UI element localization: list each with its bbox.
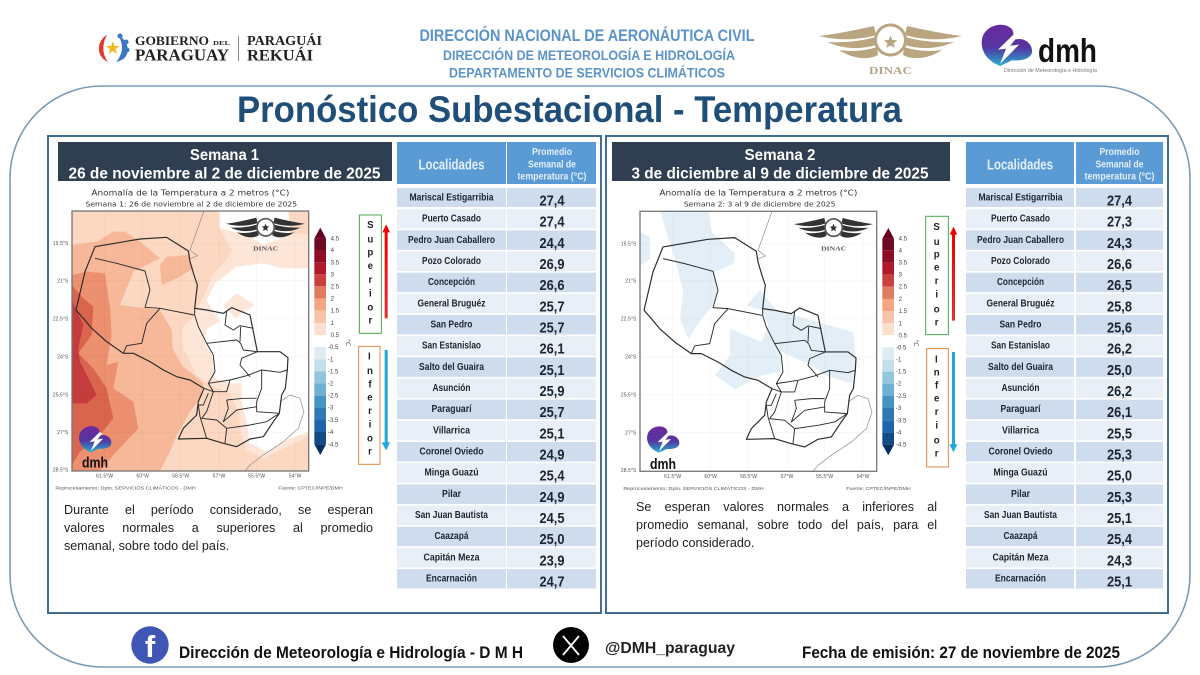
- banner: semana 1: Semana 1: [190, 147, 259, 164]
- row: Pozo Colorado: 26,6: [1107, 257, 1132, 273]
- row: Mariscal Estigarribia: [966, 188, 1163, 210]
- banner: semana 2: 3 de diciembre al 9 de diciembre de 2025: [632, 166, 929, 182]
- row: Paraguarí: Paraguarí: [1000, 404, 1042, 415]
- colorbar: 4.5: [331, 236, 340, 242]
- row: Pilar: [966, 484, 1163, 506]
- row: San Estanislao: 26,1: [540, 342, 564, 358]
- row: Villarrica: [397, 421, 596, 442]
- institutional header text: [420, 26, 754, 80]
- row: Concepción: [966, 273, 1163, 294]
- colorbar: -2: [328, 381, 334, 387]
- row: Asunción: 25,9: [540, 384, 564, 400]
- chart: mapa de anomalía semana 2: [621, 188, 957, 492]
- colorbar: 3: [331, 272, 335, 278]
- axis labels: 55.5°W: [248, 474, 265, 480]
- institutional header text: DIRECCIÓN DE METEOROLOGÍA E HIDROLOGÍA: [443, 48, 735, 63]
- axis labels: 61.5°W: [664, 474, 681, 480]
- legend: superior: p: [367, 247, 373, 258]
- legend: inferior: i: [369, 419, 371, 430]
- legend: superior: p: [934, 250, 940, 261]
- banner: semana 1: [58, 142, 392, 182]
- icon: logo dmh en mapa: dmh: [650, 457, 676, 473]
- row: Villarrica: Villarrica: [433, 425, 470, 436]
- row: San Estanislao: [966, 336, 1163, 358]
- row: Pozo Colorado: Pozo Colorado: [991, 256, 1050, 267]
- colorbar: -2: [896, 382, 902, 388]
- row: Caazapá: 25,0: [540, 532, 564, 548]
- table header: Promedio: [532, 147, 572, 158]
- colorbar: -3.5: [328, 418, 339, 424]
- logo: DINAC: DINAC: [869, 65, 912, 77]
- row: Asunción: 26,2: [1107, 384, 1132, 400]
- colorbar: 2.5: [899, 285, 908, 291]
- colorbar: 0.5: [331, 333, 340, 339]
- row: San Pedro: [397, 315, 596, 337]
- row: Mariscal Estigarribia: 27,4: [540, 194, 564, 210]
- axis labels: 19.5°S: [621, 241, 637, 247]
- source notes: [55, 485, 343, 492]
- colorbar: -1.5: [328, 369, 339, 375]
- axis labels: 19.5°S: [53, 241, 69, 247]
- row: Salto del Guaira: 25,1: [540, 363, 564, 379]
- row: Pilar: Pilar: [442, 489, 461, 500]
- footer text: facebook account: Dirección de Meteorología e Hidrología - D M H: [179, 644, 523, 662]
- icon: logo DINAC en mapa: DINAC: [821, 246, 846, 253]
- table header: Semanal de: [1096, 160, 1144, 170]
- colorbar: 1: [899, 321, 903, 327]
- colorbar: -1: [328, 357, 334, 363]
- row: San Pedro: San Pedro: [1000, 320, 1042, 331]
- source notes: Reprocesamiento: Dpto. SERVICIOS CLIMÁTICOS - DMH: [55, 485, 196, 492]
- row: Villarrica: 25,5: [1107, 426, 1132, 442]
- row: Encarnación: 24,7: [540, 575, 564, 591]
- axis labels: [53, 241, 301, 480]
- axis labels: 58.5°W: [740, 474, 757, 480]
- axis labels: 54°W: [857, 474, 869, 480]
- legend: inferior: r: [368, 447, 372, 458]
- legend: inferior: o: [367, 433, 373, 444]
- banner: semana 1: 26 de noviembre al 2 de diciembre de 2025: [68, 166, 381, 182]
- row: Caazapá: [397, 527, 596, 548]
- legend: inferior: r: [368, 406, 372, 417]
- row: Mariscal Estigarribia: [397, 188, 596, 210]
- colorbar: 3.5: [331, 260, 340, 266]
- legend: superior: r: [935, 318, 939, 329]
- legend: superior: r: [935, 276, 939, 287]
- source notes: Reprocesamiento: Dpto. SERVICIOS CLIMÁTICOS - DMH: [623, 485, 764, 492]
- logo: dmh: [982, 25, 1098, 74]
- colorbar: -1.5: [896, 370, 907, 376]
- chart: mapa de anomalía semana 1: Semana 1: 26 de noviembre al 2 de diciembre de 2025: [85, 200, 297, 208]
- row: Minga Guazú: [397, 463, 596, 485]
- row: Mariscal Estigarribia: Mariscal Estigarribia: [978, 192, 1063, 204]
- row: General Bruguéz: General Bruguéz: [986, 298, 1054, 309]
- icon: logo DINAC en mapa: DINAC: [253, 245, 278, 252]
- row: San Estanislao: San Estanislao: [991, 341, 1050, 352]
- footer text: fecha de emisión: Fecha de emisión: 27 de noviembre de 2025: [802, 644, 1120, 662]
- source notes: Fuente: CPTEC/INPE/DMH: [278, 486, 343, 492]
- row: Asunción: Asunción: [432, 383, 470, 394]
- row: Pilar: 25,3: [1107, 490, 1132, 506]
- row: Pedro Juan Caballero: 24,4: [540, 236, 564, 252]
- colorbar: [314, 228, 351, 455]
- colorbar: -4: [328, 430, 334, 436]
- table: semana 2: [966, 142, 1163, 591]
- legend: inferior: I: [368, 352, 371, 363]
- row: Minga Guazú: [966, 463, 1163, 485]
- row: Concepción: [397, 273, 596, 294]
- legend: inferior: I: [935, 354, 938, 365]
- row: San Estanislao: San Estanislao: [422, 341, 481, 352]
- colorbar: -0.5: [328, 345, 339, 351]
- row: Pozo Colorado: 26,9: [540, 257, 564, 273]
- legend: superior: o: [367, 302, 373, 313]
- row: Pozo Colorado: [397, 252, 596, 273]
- row: Puerto Casado: [966, 209, 1163, 231]
- legend: superior: S: [367, 220, 374, 231]
- row: General Bruguéz: General Bruguéz: [418, 298, 486, 309]
- row: General Bruguéz: [966, 294, 1163, 315]
- row: San Juan Bautista: [397, 506, 596, 527]
- row: Minga Guazú: Minga Guazú: [424, 468, 478, 479]
- legend: superior: S: [933, 222, 940, 233]
- legend: superior: u: [934, 237, 940, 248]
- legend: inferior: e: [367, 393, 373, 404]
- icon: logo DINAC en mapa: [226, 218, 305, 252]
- institutional header text: DEPARTAMENTO DE SERVICIOS CLIMÁTICOS: [449, 66, 725, 80]
- logo: dmh: dmh: [1038, 32, 1097, 69]
- panel: semana 2: [606, 136, 1168, 613]
- row: San Juan Bautista: San Juan Bautista: [415, 510, 488, 521]
- table header: [397, 142, 596, 184]
- axis labels: 57°W: [213, 474, 225, 480]
- logo: Gobierno del Paraguay: [99, 33, 322, 64]
- row: Concepción: 26,5: [1107, 278, 1132, 294]
- row: Minga Guazú: 25,0: [1107, 469, 1132, 485]
- source notes: [623, 485, 911, 492]
- text block: semana 2: período considerado.: [636, 536, 754, 550]
- banner: semana 2: Semana 2: [744, 147, 816, 164]
- row: General Bruguéz: [397, 294, 596, 315]
- logo: Gobierno del Paraguay: DEL: [213, 40, 231, 47]
- axis labels: 57°W: [781, 474, 793, 480]
- row: San Pedro: San Pedro: [430, 320, 472, 331]
- colorbar: 2: [331, 297, 335, 303]
- legend: superior: e: [368, 261, 374, 272]
- chart: mapa de anomalía semana 2: Semana 2: 3 al 9 de diciembre de 2025: [684, 201, 835, 209]
- logo: dmh: Dirección de Meteorología e Hidrología: [1004, 68, 1098, 74]
- legend: superior: u: [367, 234, 373, 245]
- axis labels: 27°S: [57, 430, 69, 436]
- legend: inferior: r: [935, 449, 939, 460]
- legend: superior: [359, 215, 390, 333]
- logo: Gobierno del Paraguay: PARAGUAY: [135, 46, 229, 64]
- banner: semana 2: [612, 142, 950, 182]
- icon: logo dmh en mapa: [647, 426, 679, 473]
- row: Mariscal Estigarribia: 27,4: [1107, 194, 1132, 210]
- row: Caazapá: [966, 527, 1163, 548]
- colorbar: 3: [899, 273, 903, 279]
- axis labels: 58.5°W: [172, 474, 189, 480]
- axis labels: 55.5°W: [816, 474, 833, 480]
- legend: superior: o: [934, 304, 940, 315]
- row: Encarnación: [397, 569, 596, 591]
- icon: facebook: f: [145, 629, 156, 664]
- colorbar: -1: [896, 358, 902, 364]
- row: Minga Guazú: 25,4: [540, 469, 564, 485]
- colorbar: 3.5: [899, 261, 908, 267]
- colorbar: [882, 228, 919, 455]
- source notes: Fuente: CPTEC/INPE/DMH: [846, 486, 911, 492]
- table header: [966, 142, 1163, 184]
- icon: logo dmh en mapa: [79, 426, 111, 472]
- row: San Juan Bautista: 25,1: [1107, 511, 1132, 527]
- axis labels: 24°S: [57, 354, 69, 360]
- colorbar: -2.5: [328, 394, 339, 400]
- row: Capitán Meza: Capitán Meza: [424, 552, 480, 563]
- legend: inferior: r: [935, 407, 939, 418]
- row: Pedro Juan Caballero: [397, 230, 596, 252]
- panel: semana 1: [48, 136, 601, 613]
- footer text: X account: @DMH_paraguay: [605, 640, 735, 657]
- axis labels: 21°S: [57, 278, 69, 284]
- axis labels: [621, 241, 869, 480]
- row: Puerto Casado: Puerto Casado: [991, 214, 1050, 225]
- axis labels: 28.5°S: [621, 468, 637, 474]
- row: Coronel Oviedo: Coronel Oviedo: [988, 447, 1052, 458]
- row: Caazapá: Caazapá: [434, 531, 469, 542]
- colorbar: 4.5: [899, 237, 908, 243]
- legend: superior: i: [369, 288, 372, 299]
- text block: semana 1: semanal, sobre todo del país.: [64, 539, 229, 553]
- row: Capitán Meza: 24,3: [1107, 553, 1132, 569]
- chart: mapa de anomalía semana 1: [53, 187, 390, 492]
- legend: inferior: [927, 349, 957, 467]
- colorbar: 4: [899, 248, 903, 254]
- row: Pilar: 24,9: [540, 490, 564, 506]
- row: Pedro Juan Caballero: [966, 230, 1163, 252]
- row: Puerto Casado: [397, 209, 596, 231]
- row: Villarrica: Villarrica: [1002, 425, 1039, 436]
- table: semana 1: [397, 142, 596, 591]
- colorbar: -2.5: [896, 394, 907, 400]
- row: Pedro Juan Caballero: Pedro Juan Caballero: [408, 235, 495, 246]
- logo: Gobierno del Paraguay: GOBIERNO: [135, 34, 209, 48]
- row: Encarnación: Encarnación: [995, 574, 1046, 585]
- colorbar: 0.5: [899, 333, 908, 339]
- row: Concepción: Concepción: [428, 277, 475, 288]
- row: San Juan Bautista: [966, 506, 1163, 527]
- row: Coronel Oviedo: 24,9: [540, 448, 564, 464]
- row: San Juan Bautista: 24,5: [540, 511, 564, 527]
- row: Salto del Guaira: 25,0: [1107, 363, 1132, 379]
- table header: temperatura (°C): [1084, 172, 1154, 182]
- chart: mapa de anomalía semana 1: Anomalía de la Temperatura a 2 metros (°C): [91, 187, 289, 197]
- legend: superior: [926, 216, 957, 335]
- row: Concepción: 26,6: [540, 278, 564, 294]
- legend: inferior: e: [934, 394, 940, 405]
- row: Pozo Colorado: Pozo Colorado: [422, 256, 481, 267]
- row: Pilar: [397, 484, 596, 506]
- legend: superior: i: [935, 290, 938, 301]
- text block: semana 1: valores normales a superiores al promedio: [64, 521, 373, 535]
- axis labels: 54°W: [289, 474, 301, 480]
- row: Encarnación: [966, 569, 1163, 591]
- row: Paraguarí: 25,7: [540, 405, 564, 421]
- axis labels: 28.5°S: [53, 468, 69, 474]
- row: Paraguarí: [397, 400, 596, 421]
- icon: X: [553, 627, 589, 663]
- row: Asunción: [966, 379, 1163, 400]
- row: San Pedro: 25,7: [540, 321, 564, 337]
- row: Asunción: [397, 379, 596, 400]
- colorbar: 2: [899, 297, 903, 303]
- logo: DINAC: [819, 25, 962, 77]
- axis labels: 27°S: [625, 430, 637, 436]
- row: Paraguarí: 26,1: [1107, 405, 1132, 421]
- table header: Localidades: [418, 158, 484, 174]
- legend: inferior: n: [934, 368, 940, 379]
- axis labels: 61.5°W: [96, 474, 113, 480]
- legend: inferior: f: [368, 379, 372, 390]
- row: San Estanislao: 26,2: [1107, 342, 1132, 358]
- legend: inferior: f: [935, 380, 939, 391]
- table header: Promedio: [1100, 147, 1140, 158]
- row: Salto del Guaira: Salto del Guaira: [988, 362, 1053, 373]
- axis labels: 21°S: [625, 279, 637, 285]
- legend: superior: r: [368, 316, 372, 327]
- legend: inferior: n: [367, 366, 373, 377]
- icon: logo dmh en mapa: dmh: [82, 456, 108, 472]
- title: Pronóstico Subestacional - Temperatura: [237, 89, 902, 130]
- row: San Pedro: 25,6: [1107, 321, 1132, 337]
- row: Minga Guazú: Minga Guazú: [994, 468, 1048, 479]
- legend: superior: r: [368, 275, 372, 286]
- row: San Estanislao: [397, 336, 596, 358]
- axis labels: 60°W: [136, 474, 149, 480]
- colorbar: -3.5: [896, 418, 907, 424]
- row: Caazapá: Caazapá: [1004, 531, 1038, 542]
- colorbar: -3: [896, 406, 902, 412]
- logo: Gobierno del Paraguay: REKUÁI: [247, 48, 313, 64]
- colorbar: 1.5: [331, 309, 340, 315]
- row: Mariscal Estigarribia: Mariscal Estigarribia: [410, 192, 494, 204]
- icon: facebook: [131, 626, 169, 664]
- row: Villarrica: 25,1: [540, 426, 564, 442]
- colorbar: -4.5: [328, 442, 339, 448]
- row: Pozo Colorado: [966, 252, 1163, 273]
- legend: inferior: [359, 346, 390, 464]
- text block: semana 2: [636, 500, 937, 550]
- row: Salto del Guaira: [397, 357, 596, 379]
- row: Coronel Oviedo: Coronel Oviedo: [420, 447, 484, 458]
- colorbar: 2.5: [331, 284, 340, 290]
- text block: semana 2: promedio semanal, sobre todo del país, para el: [636, 518, 937, 532]
- row: Salto del Guaira: Salto del Guaira: [419, 362, 484, 373]
- colorbar: 1.5: [899, 309, 908, 315]
- row: Salto del Guaira: [966, 357, 1163, 379]
- text block: semana 1: [64, 503, 373, 553]
- colorbar: 4: [331, 248, 335, 254]
- row: San Pedro: [966, 315, 1163, 337]
- colorbar: -4.5: [896, 443, 907, 449]
- row: Coronel Oviedo: 25,3: [1107, 448, 1132, 464]
- legend: inferior: i: [935, 420, 938, 431]
- table header: Semanal de: [528, 160, 576, 170]
- row: Caazapá: 25,4: [1107, 532, 1132, 548]
- axis labels: 24°S: [625, 355, 637, 361]
- colorbar: -4: [896, 430, 902, 436]
- row: Concepción: Concepción: [997, 277, 1044, 288]
- row: Capitán Meza: 23,9: [540, 553, 564, 569]
- chart: mapa de anomalía semana 2: Anomalía de la Temperatura a 2 metros (°C): [659, 188, 857, 198]
- row: Coronel Oviedo: [397, 442, 596, 464]
- institutional header text: DIRECCIÓN NACIONAL DE AERONÁUTICA CIVIL: [420, 26, 754, 45]
- text block: semana 2: Se esperan valores normales a inferiores al: [636, 500, 937, 514]
- axis labels: 60°W: [704, 474, 717, 480]
- row: Encarnación: 25,1: [1107, 575, 1132, 591]
- colorbar: °C: [344, 339, 351, 346]
- row: Capitán Meza: [397, 548, 596, 569]
- colorbar: °C: [912, 339, 919, 346]
- row: Paraguarí: [966, 400, 1163, 421]
- row: Capitán Meza: Capitán Meza: [992, 552, 1049, 563]
- row: Encarnación: Encarnación: [426, 574, 477, 585]
- row: Capitán Meza: [966, 548, 1163, 569]
- axis labels: 25.5°S: [53, 392, 69, 398]
- text block: semana 1: Durante el período considerado, se esperan: [64, 503, 373, 517]
- colorbar: -3: [328, 406, 334, 412]
- row: Coronel Oviedo: [966, 442, 1163, 464]
- row: Asunción: Asunción: [1002, 383, 1040, 394]
- axis labels: 22.5°S: [621, 317, 637, 323]
- legend: superior: e: [934, 263, 940, 274]
- axis labels: 25.5°S: [621, 393, 637, 399]
- table header: temperatura (°C): [518, 172, 586, 182]
- row: Puerto Casado: Puerto Casado: [422, 214, 481, 225]
- logo: Gobierno del Paraguay: PARAGUÁI: [247, 33, 322, 48]
- row: Puerto Casado: 27,4: [540, 215, 564, 231]
- row: San Juan Bautista: San Juan Bautista: [984, 510, 1057, 521]
- row: General Bruguéz: 25,7: [540, 299, 564, 315]
- axis labels: 22.5°S: [53, 316, 69, 322]
- table header: Localidades: [987, 158, 1053, 174]
- row: Villarrica: [966, 421, 1163, 442]
- icon: logo DINAC en mapa: [794, 218, 873, 253]
- row: Paraguarí: Paraguarí: [432, 404, 473, 415]
- colorbar: -0.5: [896, 345, 907, 351]
- row: Puerto Casado: 27,3: [1107, 215, 1132, 231]
- row: Pedro Juan Caballero: 24,3: [1107, 236, 1132, 252]
- legend: inferior: o: [934, 435, 940, 446]
- colorbar: 1: [331, 321, 335, 327]
- row: Pedro Juan Caballero: Pedro Juan Caballero: [977, 235, 1064, 246]
- row: Pilar: Pilar: [1011, 489, 1030, 500]
- row: General Bruguéz: 25,8: [1107, 299, 1132, 315]
